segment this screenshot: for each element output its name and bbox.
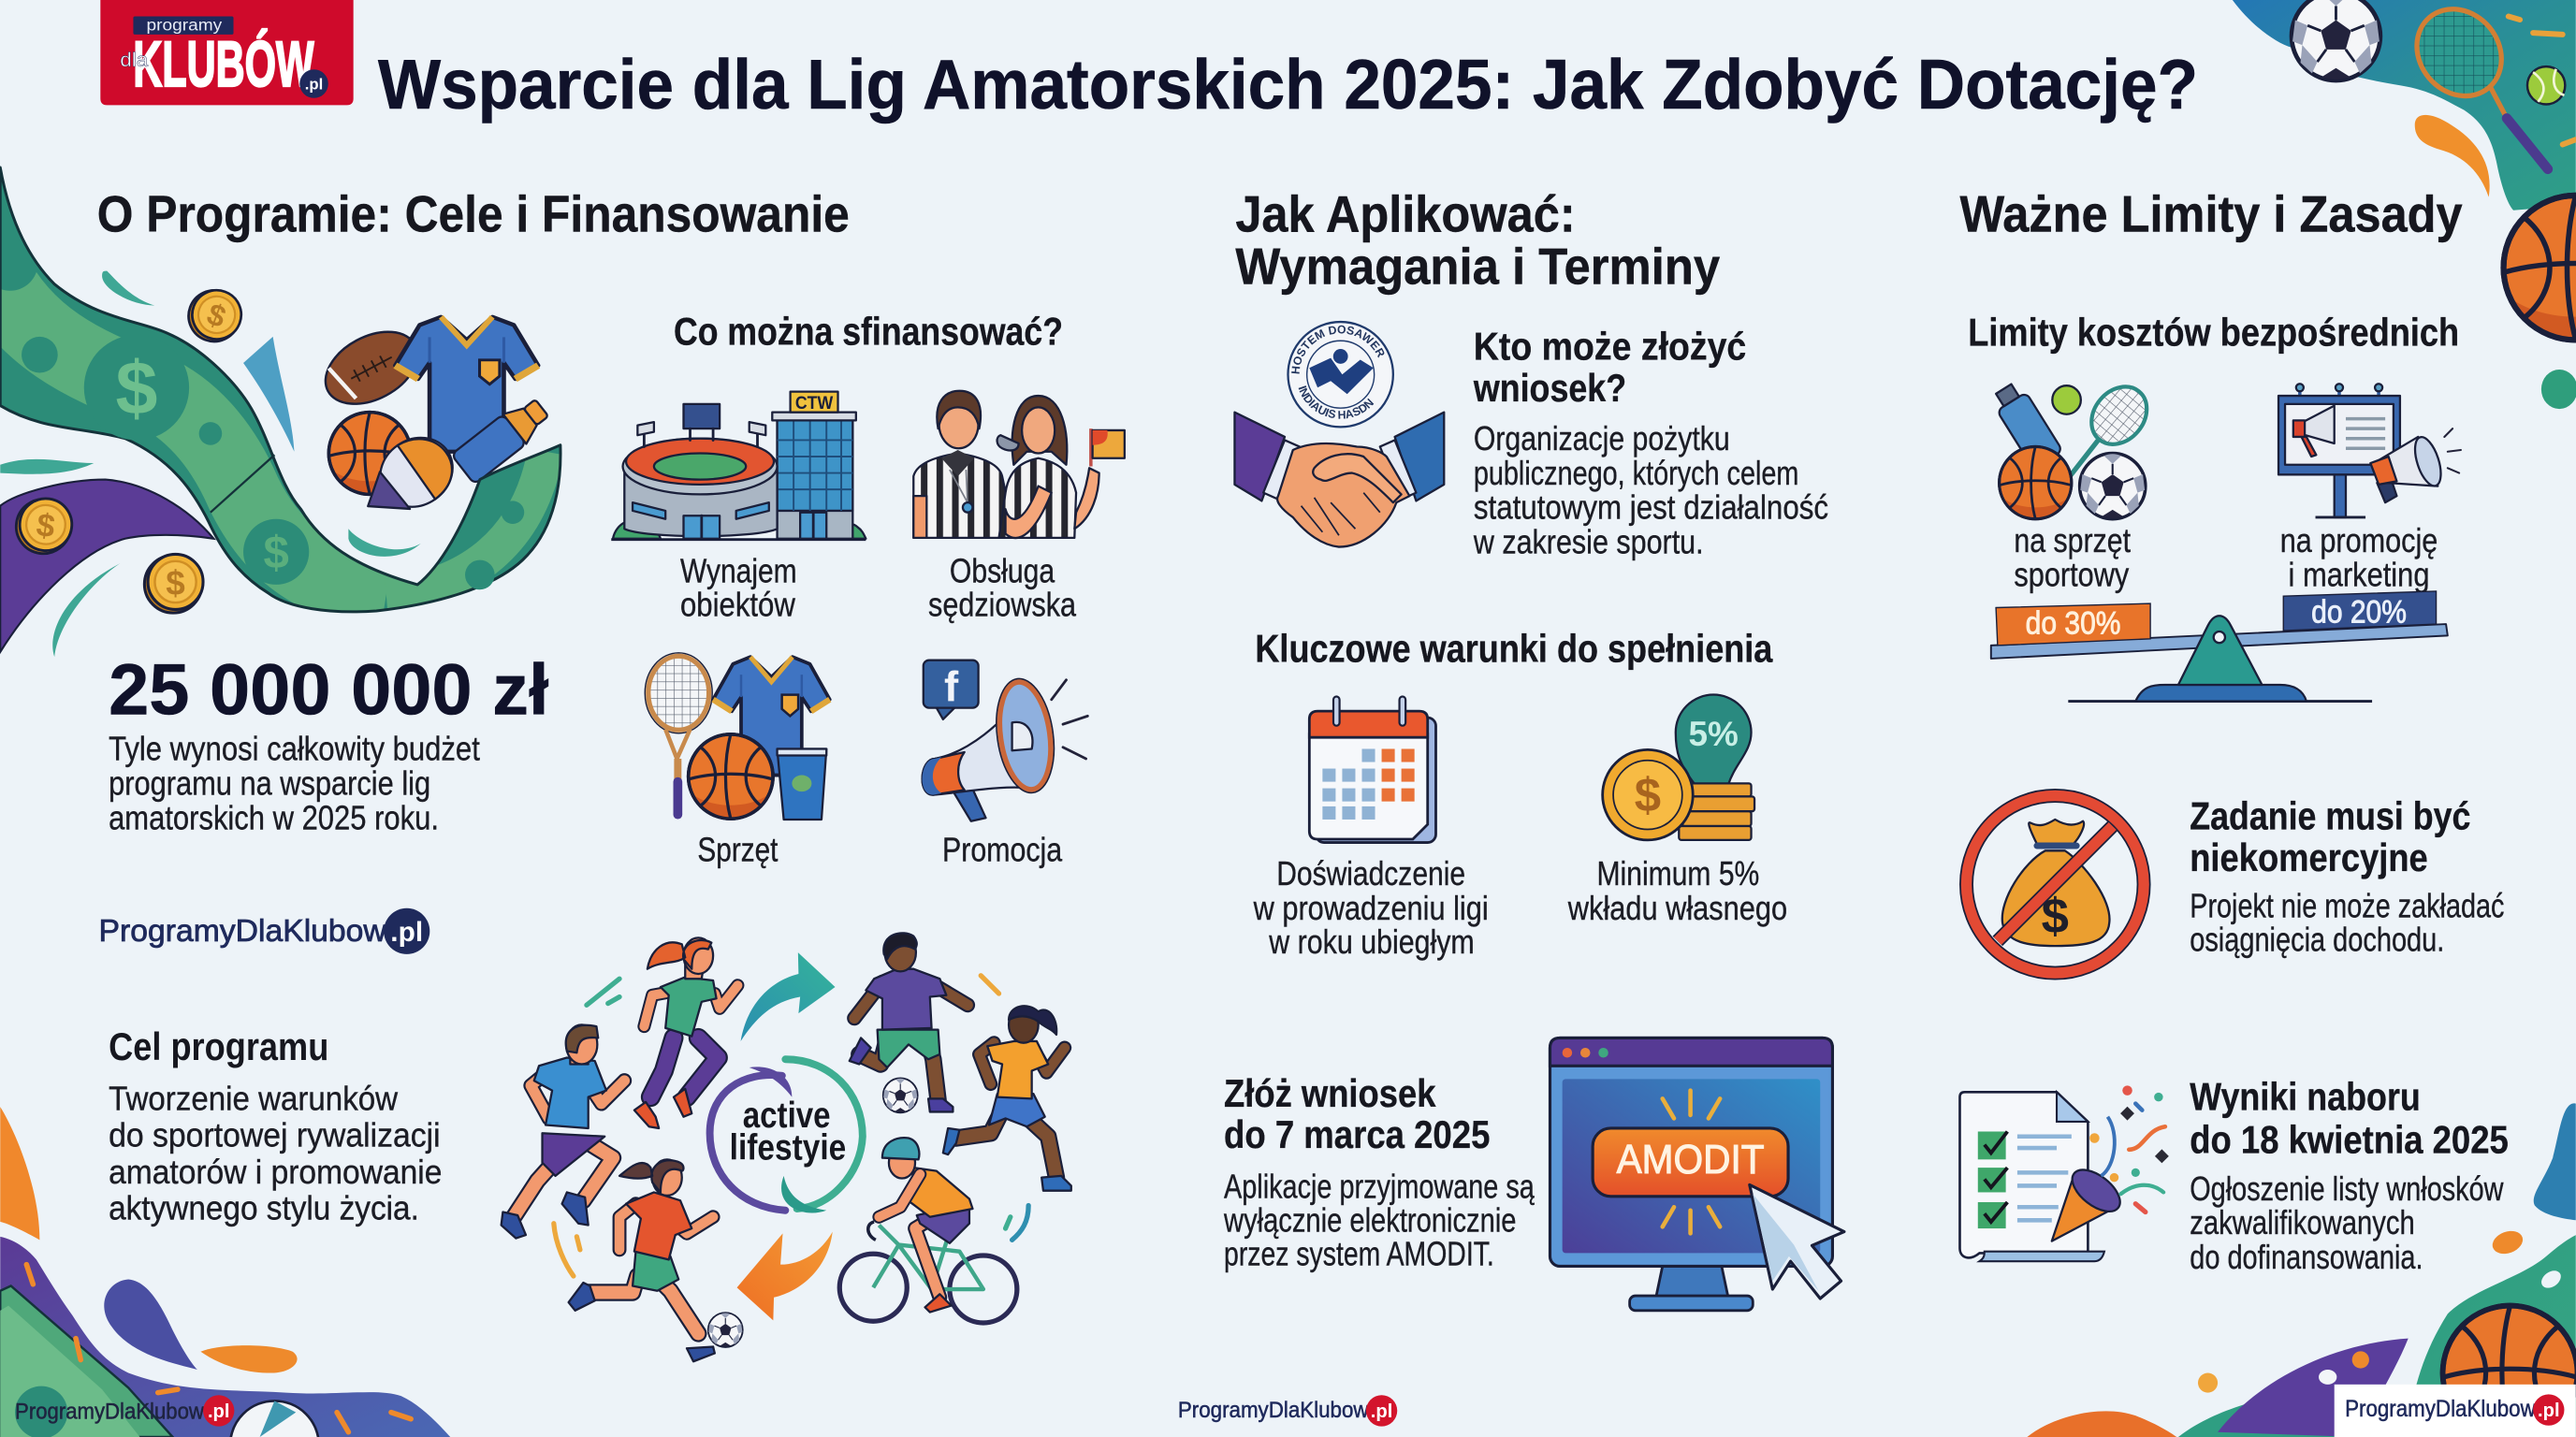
blob: blue drop [2534,1103,2576,1220]
description: przez system AMODIT. [1224,1235,1494,1273]
label: promocja: na promocję [2280,521,2438,559]
heading: Jak Aplikować: Jak Aplikować: [1235,186,1576,243]
blob: teal wave [2407,1235,2576,1437]
block: results [1959,1075,2509,1276]
heading: do 7 marca 2025 [1224,1112,1490,1156]
dots [2198,1351,2369,1393]
label: w prowadzeniu ligi [1253,889,1489,927]
logo background [100,0,354,105]
icon: sports gear [1989,376,2158,519]
blob: orange drop [2415,115,2490,197]
money ribbon [0,165,567,616]
icon: basketball [2443,1306,2576,1437]
arrow: teal [741,952,836,1041]
heading: wniosek? [1473,366,1626,410]
scale beam [1991,624,2448,659]
logo: Programy dla Klubów [100,0,354,105]
blob: orange drop [200,1345,298,1373]
description [2190,886,2504,958]
label: wkładu własnego [1567,889,1787,927]
description: wyłącznie elektronicznie [1223,1201,1517,1240]
description: Organizacje pożytku [1474,419,1730,457]
label: obiektów [680,585,796,623]
condition: experience [1253,700,1489,961]
heading: Kto może złożyć [1474,324,1746,368]
description: osiągnięcia dochodu. [2190,920,2444,958]
scale fulcrum [2135,616,2307,702]
seal: INDIAUIS HASDN [1299,385,1374,419]
icon: coins with 5 percent balloon: 5% [1689,715,1739,753]
description: Projekt nie może zakładać [2190,886,2504,924]
blob: teal mound [2178,1383,2341,1437]
blob: blue-teal wave [2233,0,2576,210]
description: statutowym jest działalność [1474,488,1828,527]
purple ribbon [0,480,213,652]
icon: crossed money bag: $ [2042,889,2069,944]
figure: woman in green [634,937,737,1128]
logo: ProgramyDlaKlubow.pl: .pl [390,917,423,948]
heading [1224,1071,1490,1156]
heading: Jak Aplikować [1235,186,1720,296]
budget description: amatorskich w 2025 roku. [109,798,439,836]
heading: O Programie: O Programie: Cele i Finansowanie [97,186,850,243]
icon: american football [313,317,429,418]
description: aktywnego stylu życia. [109,1188,419,1227]
icon: referees [913,391,1125,538]
description: Ogłoszenie listy wnłosków [2190,1169,2504,1208]
label: Minimum 5% [1597,854,1759,893]
description: do dofinansowania. [2190,1238,2423,1276]
decoration: bottom right corner [2027,1103,2576,1437]
logo: ProgramyDlaKlubow.pl [99,908,429,954]
label: Wynajem [680,551,797,589]
icon: monitor with AMODIT button [1550,1038,1844,1311]
logo: bottom center: .pl [1371,1401,1392,1422]
budget description: programu na wsparcie lig [109,764,430,803]
icon: crossed money bag [1966,796,2144,973]
seal [1287,320,1394,428]
item: Promocja [923,660,1087,869]
label: promocja [2280,521,2438,594]
coins [13,283,248,613]
heading: Jak Aplikować: Wymagania i Terminy [1235,239,1720,296]
description [109,1080,442,1227]
label [1567,854,1787,927]
heading: Co można sfinansować: Co można sfinansować? [674,310,1063,354]
figure: man in purple [850,933,968,1112]
logo: bottom center: ProgramyDlaKlubow [1178,1399,1369,1423]
description: w zakresie sportu. [1473,523,1704,561]
icon: stadium and building [611,392,866,540]
label: sprzęt: sportowy [2014,556,2129,594]
blob: orange dashes [2509,17,2576,144]
ring with active lifestyle text: active [743,1096,831,1136]
icon: volleyball [230,1401,319,1437]
heading [2190,793,2470,879]
figure: woman in red [569,1159,743,1361]
description: zakwalifikowanych [2190,1203,2415,1241]
heading: Wyniki naboru [2190,1075,2421,1119]
description: Aplikacje przyjmowane są [1224,1168,1535,1206]
logo: programy tag: programy [146,15,222,34]
icon: tennis racket [2399,0,2548,169]
description: amatorów i promowanie [109,1153,442,1191]
block: who can apply [1233,320,1828,561]
blob: orange dot [2489,1227,2525,1257]
description: Tworzenie warunków [109,1080,399,1118]
icon: megaphone with social bubble: f [944,663,959,711]
heading: Ważne Limity: Ważne Limity i Zasady [1959,186,2463,243]
icon: shuttlecock [349,424,466,533]
label: promocja: i marketing [2289,556,2430,594]
budget amount: 25 000 000 zł [109,650,549,731]
heading: Limity kosztów: Limity kosztów bezpośrednich [1968,311,2459,355]
accents [26,1265,411,1432]
blob: orange mound [2027,1411,2176,1437]
chart: balance scale of cost limits [1989,376,2461,702]
blob: white dot [2539,1267,2564,1291]
ground line [2068,701,2372,703]
label: Obsługa [950,551,1055,589]
seal: HOSTEM DOSAWER [1291,326,1385,374]
block: non-commercial [1966,793,2504,973]
logo: .pl badge [299,69,328,98]
logo: ProgramyDlaKlubow.pl: ProgramyDlaKlubow [99,914,387,949]
description [1473,419,1828,561]
label: Doświadczenie [1276,854,1465,893]
illustration: money ribbon with sports gear [0,165,567,657]
icon: basketball [2504,196,2576,340]
money ribbon: $ [263,528,289,578]
logo: bottom right on white: ProgramyDlaKlubow [2345,1397,2536,1422]
blob: purple-blue wave [0,1237,450,1437]
bar: do 20%: do 20% [2311,594,2407,630]
heading: Cel programu [109,1024,328,1068]
label: sędziowska [928,585,1076,623]
heading: niekomercyjne [2190,835,2428,879]
arrow: orange [737,1232,833,1320]
logo: .pl badge: .pl [305,76,323,94]
logo: programy tag [133,15,234,35]
heading: Zadanie musi być [2190,793,2470,837]
budget description [109,730,480,836]
motion accents [554,976,1028,1276]
description [2190,1169,2504,1276]
ring with active lifestyle text: lifestyie [730,1127,846,1168]
item: Wynajem obiektów [611,392,866,623]
bar: do 30%: do 30% [2026,606,2121,642]
logo: bottom right on white [2335,1385,2576,1437]
item: Obsługa sędziowska [913,391,1125,623]
icon: soccer ball [2292,0,2380,80]
icon: monitor with AMODIT button: AMODIT [1617,1137,1765,1183]
item: Sprzęt [645,653,830,869]
label: w roku ubiegłym [1268,922,1475,961]
description: publicznego, których celem [1474,454,1798,492]
icon: handshake with seal [1233,320,1445,548]
bar: do 30% [1996,603,2150,646]
figure: cyclist [839,1138,1017,1323]
money ribbon: $ [115,346,157,430]
label: Promocja [942,831,1062,869]
heading [1473,324,1746,410]
icon: coins with 5 percent balloon [1603,695,1754,840]
icon: basketball [328,413,411,494]
ring with active lifestyle text [710,1059,863,1212]
blob: orange drop [0,1107,39,1240]
accent shapes [0,271,421,657]
blob: green dot [2541,370,2576,409]
label: sprzęt: na sprzęt [2014,521,2131,559]
budget block [109,650,549,836]
heading: do 18 kwietnia 2025 [2190,1117,2509,1161]
heading [2190,1075,2509,1161]
icon: tennis ball [2527,66,2565,104]
label: sprzęt [2014,521,2131,594]
decoration: bottom left corner [0,1107,450,1437]
icon: equipment set [645,653,830,820]
cluster: sports equipment [313,317,554,533]
logo: KLUBÓW: KLUBÓW [133,28,314,100]
icon: calendar [1309,700,1435,843]
icon: billboard with megaphone [2278,384,2461,517]
icon: coins with 5 percent balloon: $ [1635,768,1661,821]
block: Cel programu [109,1024,442,1227]
logo: dla: dla [120,50,149,71]
blob: purple mound [2218,1339,2409,1437]
figure: runner in blue [502,1024,624,1239]
icon: bottle [451,393,554,485]
description [1223,1168,1535,1273]
logo: bottom left: ProgramyDlaKlubow [15,1401,205,1425]
label: Sprzęt [697,831,778,869]
logo: bottom right on white: .pl [2538,1401,2560,1421]
icon: megaphone with social bubble [923,660,1087,821]
heading: Złóż wniosek [1224,1071,1436,1115]
block: submit application [1223,1038,1844,1311]
logo: bottom left: .pl [208,1401,229,1422]
description: do sportowej rywalizacji [109,1115,441,1154]
blob: blue drop [104,1279,197,1370]
budget description: Tyle wynosi całkowity budżet [109,730,480,768]
label [1253,854,1489,961]
figure: woman in orange [943,1006,1071,1191]
title: Wsparcie dla Lig Amatorskich 2025: Jak Zdobyć Dotację? [378,45,2198,123]
icon: checklist with party popper [1959,1085,2169,1261]
icon: jersey [395,317,538,452]
heading: Kluczowe warunki: Kluczowe warunki do spełnienia [1255,626,1773,670]
blob: green banknote [0,1286,173,1437]
bar: do 20% [2283,591,2437,631]
icon: stadium and building: CTW [795,394,834,414]
illustration: active lifestyle [502,933,1071,1361]
condition: own contribution [1567,695,1787,927]
decoration: top right sports corner [2233,0,2576,409]
